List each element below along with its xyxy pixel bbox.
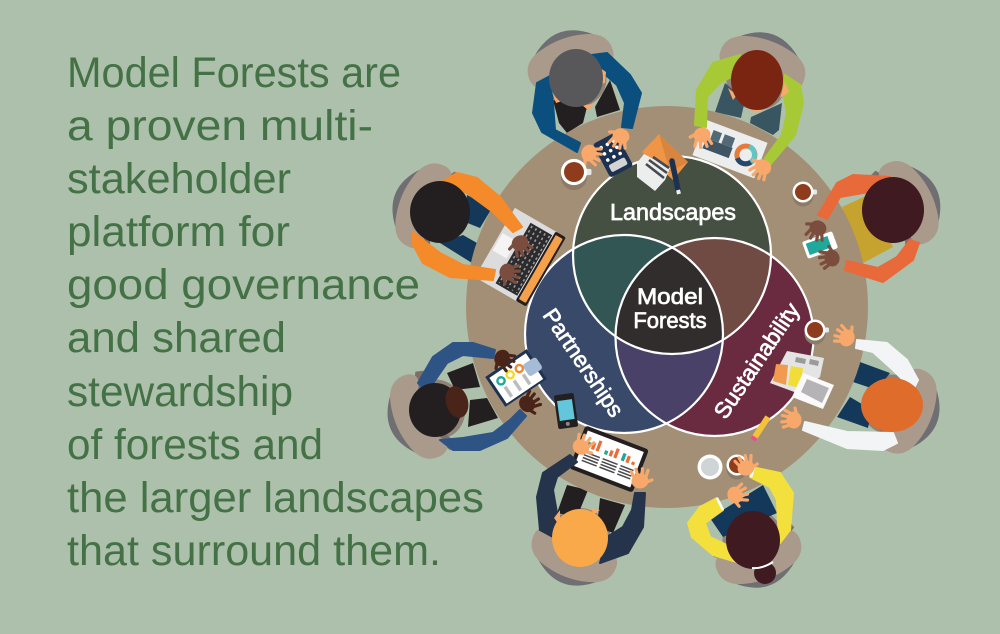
heading text: Model Forests statement: the larger landscapes — [67, 474, 484, 522]
chairs around the table — [373, 17, 956, 601]
clipboard — [485, 347, 549, 407]
heading text: Model Forests statement: stakeholder — [67, 155, 291, 203]
hair bun — [442, 384, 472, 420]
label: Landscapes: Landscapes — [610, 199, 736, 225]
sleeve cuffs — [717, 467, 754, 510]
head — [726, 511, 780, 569]
heading text: Model Forests statement — [67, 49, 484, 575]
overlap: Landscapes and Partnerships — [574, 236, 670, 334]
saucer — [698, 454, 722, 480]
hands — [578, 142, 603, 168]
hair bun — [754, 562, 776, 584]
head — [410, 181, 470, 243]
arms — [803, 340, 918, 450]
heading text: Model Forests statement: that surround them. — [67, 527, 441, 575]
hands — [725, 483, 750, 509]
heading text: Model Forests statement: stewardship — [67, 368, 293, 416]
hands — [833, 322, 859, 349]
ears and neck — [552, 68, 606, 110]
overlap: Partnerships and Sustainability — [616, 338, 722, 422]
arms — [533, 53, 641, 152]
hands — [490, 347, 517, 374]
label: Model Forests: Forests — [633, 308, 707, 333]
label: Model Forests: Model — [637, 284, 703, 309]
envelope and note — [637, 134, 688, 194]
coffee cup, top right — [792, 182, 817, 206]
head — [862, 177, 924, 243]
arms — [688, 467, 793, 562]
head — [861, 378, 923, 432]
Venn diagram — [525, 156, 814, 436]
laptop — [475, 208, 566, 307]
hands — [803, 217, 829, 242]
report sheet — [692, 120, 768, 178]
phone — [802, 231, 838, 259]
data sheet — [792, 373, 834, 409]
person: yellow sweater with notebook — [688, 453, 793, 584]
label: Partnerships: Partnerships — [538, 304, 629, 422]
person: white sweater with orange hair — [781, 322, 923, 450]
legs and laps of the seated people — [440, 80, 893, 537]
calculator — [593, 132, 633, 178]
hair band — [752, 562, 773, 568]
overlap: Model Forests centre — [616, 248, 722, 353]
arms — [818, 175, 919, 282]
circle outlines — [525, 156, 814, 436]
pen — [672, 161, 678, 190]
head — [549, 49, 603, 107]
person: orange sweater with laptop — [410, 173, 566, 307]
circle: Sustainability — [616, 238, 814, 436]
head — [409, 383, 461, 437]
arms — [412, 173, 522, 280]
heading text: Model Forests statement: platform for — [67, 208, 290, 256]
coffee cup, bottom — [726, 454, 751, 480]
tablet — [569, 425, 649, 493]
envelope — [642, 134, 688, 180]
round table — [466, 106, 868, 508]
heading text: Model Forests statement: of forests and — [67, 421, 323, 469]
label: Sustainability: Sustainability — [709, 298, 805, 423]
heading text: Model Forests statement: and shared — [67, 314, 286, 362]
hands — [689, 126, 712, 149]
arms — [537, 455, 645, 563]
heading text: Model Forests statement: good governance — [67, 261, 420, 309]
ears and neck — [728, 82, 789, 113]
documents on the table — [753, 351, 834, 440]
overlap: Landscapes and Sustainability — [674, 239, 770, 338]
person: orange-red sweater with phone — [802, 175, 924, 282]
arms — [695, 55, 803, 165]
person: green sweater with report — [689, 50, 803, 182]
head — [731, 50, 783, 110]
arms — [418, 343, 526, 450]
circle: Partnerships — [525, 235, 723, 433]
smartphone on the table — [554, 393, 578, 429]
heading text: Model Forests statement: Model Forests are — [67, 49, 401, 97]
hands — [570, 432, 597, 459]
hands — [506, 232, 533, 259]
person: blue sweater with calculator — [533, 49, 641, 178]
pencil — [755, 417, 768, 437]
heading text: Model Forests statement: a proven multi- — [67, 102, 373, 150]
person: blue sweater with clipboard — [409, 343, 549, 450]
person: navy sweater with tablet — [537, 425, 653, 567]
coffee cup, top left — [561, 159, 592, 190]
head — [552, 509, 608, 567]
circle: Landscapes — [573, 156, 771, 354]
folder — [770, 351, 824, 393]
ears — [554, 508, 600, 526]
note — [637, 154, 670, 191]
coffee cup, right — [804, 320, 829, 344]
